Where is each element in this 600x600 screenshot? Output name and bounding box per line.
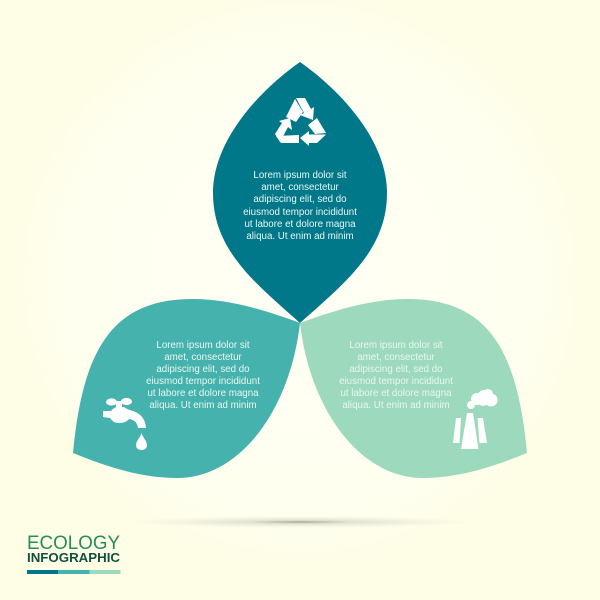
heading: ecology: ECOLOGY [27, 532, 120, 554]
text: left leaf: aliqua. Ut enim ad minim [149, 400, 257, 411]
text: left leaf: eiusmod tempor incididunt [146, 376, 260, 387]
panel: right leaf [300, 299, 527, 478]
text: right leaf: eiusmod tempor incididunt [339, 376, 453, 387]
icon: recycle [275, 98, 326, 146]
text: top leaf: ut labore et dolore magna [244, 219, 356, 230]
panel: left leaf [73, 299, 300, 478]
text: right leaf: ut labore et dolore magna [340, 388, 452, 399]
text: right leaf: Lorem ipsum dolor sit [349, 340, 443, 351]
text: top leaf: adipiscing elit, sed do [253, 194, 347, 205]
legend bar [27, 570, 120, 574]
icon: tap [103, 398, 147, 450]
text: top leaf: aliqua. Ut enim ad minim [246, 231, 354, 242]
ground shadow [125, 516, 475, 528]
logo: ecology infographic [27, 532, 120, 574]
text: left leaf: amet, consectetur [164, 352, 242, 363]
text: left leaf: ut labore et dolore magna [147, 388, 259, 399]
text: right leaf: adipiscing elit, sed do [349, 364, 443, 375]
text: right leaf: amet, consectetur [357, 352, 435, 363]
text: top leaf: Lorem ipsum dolor sit [253, 170, 347, 181]
text: left leaf: adipiscing elit, sed do [156, 364, 250, 375]
panel: top leaf [213, 62, 387, 323]
text: right leaf: aliqua. Ut enim ad minim [342, 400, 450, 411]
text: left leaf: Lorem ipsum dolor sit [156, 340, 250, 351]
heading: infographic: INFOGRAPHIC [27, 551, 120, 565]
text: top leaf: amet, consectetur [261, 182, 339, 193]
icon: factory [453, 389, 498, 449]
text: top leaf: eiusmod tempor incididunt [243, 207, 357, 218]
